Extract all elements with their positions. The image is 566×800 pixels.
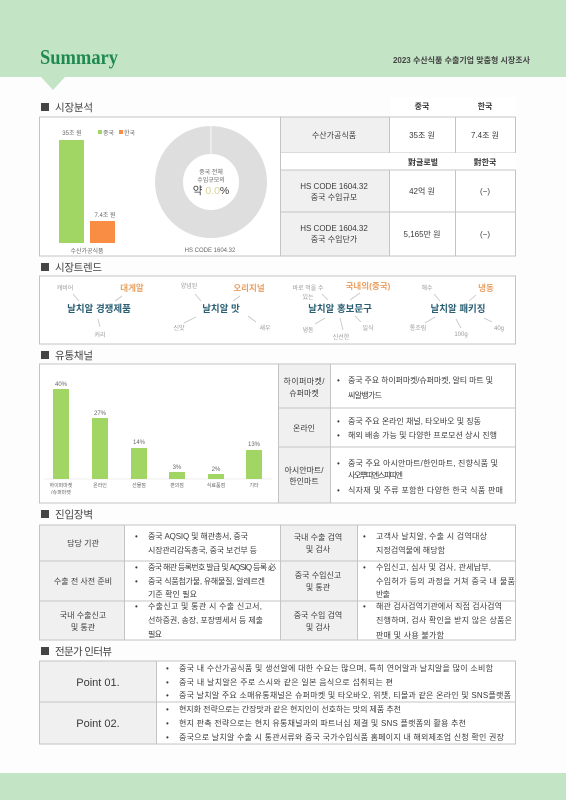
row: point 02: 중국으로 날치알 수출 시 통관서류와 중국 국가수입식품 홈페이지 내 해외제조업 신청 확인 권장 [179,732,505,742]
cell: agencies: 중국 AQSIQ 및 해관총서, 중국 [148,531,248,541]
report name: 2023 수산식품 수출기업 맞춤형 시장조사 [393,55,531,65]
row: import volume: (−) [480,187,490,196]
row: hypermarket: 씨알뱅가드 [348,390,382,400]
row: hypermarket [278,364,516,408]
row: asian mart: 한인마트 [289,476,319,486]
cell: agencies [40,525,280,561]
keyword cluster: competing products: 대게알 [120,283,144,293]
cell: domestic export declaration: 국내 수출신고 [60,610,106,620]
keyword cluster: promotional phrases: 신선한 [333,333,350,341]
cell: china import declaration: 수입신고, 심사 및 검사, 관세납부, [376,562,491,572]
bar chart: processed seafood: 한국 [124,130,136,137]
cell: china import quarantine: 중국 수입 검역 [294,610,342,620]
keyword cluster: promotional phrases: 날치알 홍보문구 [308,303,372,315]
panel: market size charts [40,117,280,256]
heading: entry barriers: 진입장벽 [55,508,93,521]
row: point 02: 현지화 전략으로는 간장맛과 같은 현지인이 선호하는 맛의 제품 추천 [179,704,401,714]
bar: online 27%: 온라인 [93,482,107,489]
keyword cluster: packaging: 냉동 [478,283,494,293]
keyword cluster: packaging: 100g [454,332,468,338]
cell: china import declaration: 및 통관 [306,582,331,592]
cell: pre-export preparation: • [135,577,138,586]
keyword cluster: competing products: 날치알 경쟁제품 [67,303,131,315]
cell: pre-export preparation: • [135,563,138,572]
row: point 01: • [166,678,169,687]
row: point 01 [40,661,516,702]
cell: pre-export preparation [40,561,280,601]
row: point 01: 중국 내 수산가공식품 및 생선알에 대한 수요는 많으며, 특히 연어알과 날치알을 많이 소비함 [179,663,494,673]
row: online: 중국 주요 온라인 채널, 타오바오 및 징동 [348,416,481,426]
row: import volume: HS CODE 1604.32 [300,182,368,191]
table: entry barriers [40,525,516,640]
cell: china import quarantine: 판매 및 사용 불가함 [376,630,445,640]
keyword cluster: promotional phrases: 바로 먹을 수 [293,284,324,292]
keyword cluster: taste: 신맛 [173,324,185,332]
bar: grocery 2%: 식료품점 [207,482,225,489]
row: online: 온라인 [293,423,315,433]
cell: china import quarantine [280,601,516,640]
bar chart: processed seafood: 수산가공식품 [70,247,104,255]
footer band [0,773,566,800]
row: import volume: 중국 수입규모 [311,193,357,202]
keyword cluster: packaging [410,283,504,338]
bar: online 27%: 27% [94,411,107,417]
keyword cluster: promotional phrases: 국내의(중국) [346,281,391,291]
keyword cluster: promotional phrases: 있는 [302,293,314,301]
row: asian mart: 중국 주요 아시안마트/한인마트, 진향식품 및 [348,458,498,468]
cell: domestic export declaration: 선하증권, 송장, 포장명세서 등 제출 [148,615,263,625]
donut chart: HS code share: 중국 전체 [199,168,223,176]
row: point 01: • [166,664,169,673]
bar: grocery 2% [207,467,225,489]
keyword cluster: taste: 오리지널 [233,283,265,293]
row: processed seafood: 35조 원 [409,131,435,140]
bar: other 13% [246,442,262,489]
cell: pre-export preparation: 중국 식품첨가물, 유해물질, 알레르겐 [148,576,265,586]
keyword cluster: promotional phrases: 냉동 [302,326,314,334]
heading: distribution channels: 유통채널 [55,350,93,362]
bar: other 13%: 기타 [249,482,259,489]
bar: convenience store 3%: 편의점 [170,482,184,489]
row: point 02: 현지 판촉 전략으로는 현지 유통채널과의 파트너십 체결 및 SNS 플랫폼의 활용 추천 [179,718,466,728]
cell: pre-export preparation: 중국 해관 등록번호 발급 및 AQSIQ 등록 必 [148,562,276,572]
bar: hypermarket 40%: /슈퍼마켓 [51,489,71,496]
row: point 01: 중국 날치알 주요 소매유통채널은 슈퍼마켓 및 타오바오, 위챗, 티몰과 같은 온라인 및 SNS플랫폼 [179,690,511,700]
bar: grocery 2%: 2% [212,467,221,473]
cell: domestic export declaration: 필요 [148,629,162,639]
cell: agencies: • [135,532,138,541]
keyword cluster: taste: 날치알 맛 [202,303,240,315]
bar: department store 14%: 14% [133,440,146,446]
cell: domestic quarantine: 지정검역물에 해당함 [376,545,446,555]
header band [0,0,566,90]
row: hypermarket: • [337,376,340,385]
bar: online 27% [92,411,108,489]
heading: market trend: 시장트렌드 [55,262,102,274]
bar: hypermarket 40%: 40% [55,382,68,388]
row: import unit price: (−) [480,230,490,239]
row: point 02: Point 02. [76,718,120,730]
row: sub header: 對한국 [474,157,497,167]
row: asian mart [278,447,516,503]
title: Summary [40,45,118,69]
keyword cluster: packaging: 통조림 [410,324,426,332]
donut chart: HS code share: HS CODE 1604.32 [185,248,236,254]
heading: market analysis: 시장분석 [55,102,93,114]
bar chart: processed seafood: 7.4조 원 [94,211,116,219]
cell: china import quarantine: 진행하며, 검사 확인을 받지 않은 상품은 [376,615,512,625]
bar: convenience store 3% [169,465,185,489]
cell: agencies: 시장관리감독총국, 중국 보건부 등 [148,545,257,555]
cell: domestic quarantine: • [363,532,366,541]
row: import unit price [280,212,516,256]
cell: china import declaration: 중국 수입신고 [295,571,341,580]
donut chart: HS code share: 약 0.0% [193,185,229,197]
keyword cluster: taste: 새우 [259,324,271,332]
row: sub header [281,153,516,170]
keyword cluster: packaging: 날치알 패키징 [430,303,486,315]
row: hypermarket: 중국 주요 하이퍼마켓/슈퍼마켓, 알티 마트 및 [348,375,493,385]
panel: channel bar chart [40,364,278,503]
table: market size: 한국 [478,101,493,111]
heading: entry barriers [41,508,93,521]
bar: hypermarket 40% [49,382,73,496]
row: import volume: 42억 원 [409,186,435,196]
row: point 02 [40,702,516,744]
keyword cluster: taste: 양념된 [181,282,197,290]
row: processed seafood [280,117,516,153]
row: import unit price: HS CODE 1604.32 [300,224,368,233]
panel: market trend keywords [40,276,516,344]
cell: domestic export declaration: 및 통관 [71,622,96,632]
bar chart: processed seafood: 중국 [103,130,115,137]
cell: domestic export declaration: 수출신고 및 통관 시 수출 신고서, [148,601,262,611]
cell: domestic quarantine: 국내 수출 검역 [294,532,342,542]
row: asian mart: 식자재 및 주류 포함한 다양한 한국 식품 판매 [348,485,503,495]
cell: china import quarantine: • [363,602,366,611]
keyword cluster: competing products [57,283,144,339]
table: market size [280,97,516,256]
row: point 02: • [166,719,169,728]
cell: pre-export preparation: 수출 전 사전 준비 [54,576,112,586]
table: expert interview [40,661,516,744]
bar: hypermarket 40%: 하이퍼마켓 [49,482,73,489]
row: hypermarket: 하이퍼마켓/ [284,376,325,386]
row: online: • [337,431,340,440]
row: asian mart: • [337,486,340,495]
row: online: • [337,417,340,426]
bar: department store 14% [131,440,147,489]
bar chart: processed seafood [59,129,136,255]
row: processed seafood: 수산가공식품 [312,130,356,140]
cell: domestic quarantine [280,525,516,561]
cell: china import quarantine: 및 검사 [306,622,331,632]
row: online: 해외 배송 가능 및 다양한 프로모션 상시 진행 [348,430,497,440]
bar chart: processed seafood: 35조 원 [62,129,82,137]
cell: domestic export declaration: • [135,602,138,611]
row: sub header: 對글로벌 [408,157,438,167]
row: point 01: 중국 내 날치알은 주로 스시와 같은 일본 음식으로 섭취되는 편 [179,677,393,687]
donut chart: HS code share: 수입규모의 [197,176,225,184]
row: asian mart: 사오뿌띠엔스피띠엔 [348,470,403,480]
row: point 01: • [166,691,169,700]
heading: expert interview: 전문가 인터뷰 [55,646,112,658]
keyword cluster: promotional phrases: 일식 [362,324,374,332]
keyword cluster: packaging: 해수 [421,284,433,292]
row: point 01: Point 01. [76,677,120,689]
row: import unit price: 중국 수입단가 [311,234,358,244]
keyword cluster: promotional phrases [293,281,391,341]
cell: pre-export preparation: 기준 확인 필요 [148,589,197,599]
row: online [278,408,516,447]
cell: china import declaration: 수입허가 등의 과정을 거쳐 중국 내 물품 [376,576,515,586]
row: import unit price: 5,165만 원 [404,230,440,239]
cell: china import declaration: 반출 [376,589,390,599]
cell: china import declaration [280,561,516,601]
row: asian mart: • [337,459,340,468]
cell: domestic quarantine: 고객사 날치알, 수출 시 검역대상 [376,531,488,541]
row: point 02: • [166,733,169,742]
donut chart: HS code share [169,126,253,254]
cell: china import declaration: • [363,563,366,572]
table: channel descriptions [278,364,516,503]
row: asian mart: 아시안마트/ [284,465,324,475]
keyword cluster: packaging: 40g [494,326,504,332]
row: point 02: • [166,705,169,714]
table: market size: 중국 [415,102,430,111]
keyword cluster: competing products: 커리 [94,331,106,339]
cell: china import quarantine: 해관 검사검역기관에서 직접 검사검역 [376,601,502,611]
cell: agencies: 담당 기관 [67,538,99,548]
bar: other 13%: 13% [248,442,261,448]
row: hypermarket: 슈퍼마켓 [289,388,319,398]
bar: department store 14%: 선물점 [132,482,146,489]
keyword cluster: taste [173,282,271,332]
cell: domestic quarantine: 및 검사 [306,544,331,554]
keyword cluster: competing products: 캐비어 [57,284,73,292]
row: processed seafood: 7.4조 원 [471,131,499,140]
cell: domestic export declaration [40,601,280,640]
row: import volume [280,170,516,212]
bar: convenience store 3%: 3% [173,465,182,471]
